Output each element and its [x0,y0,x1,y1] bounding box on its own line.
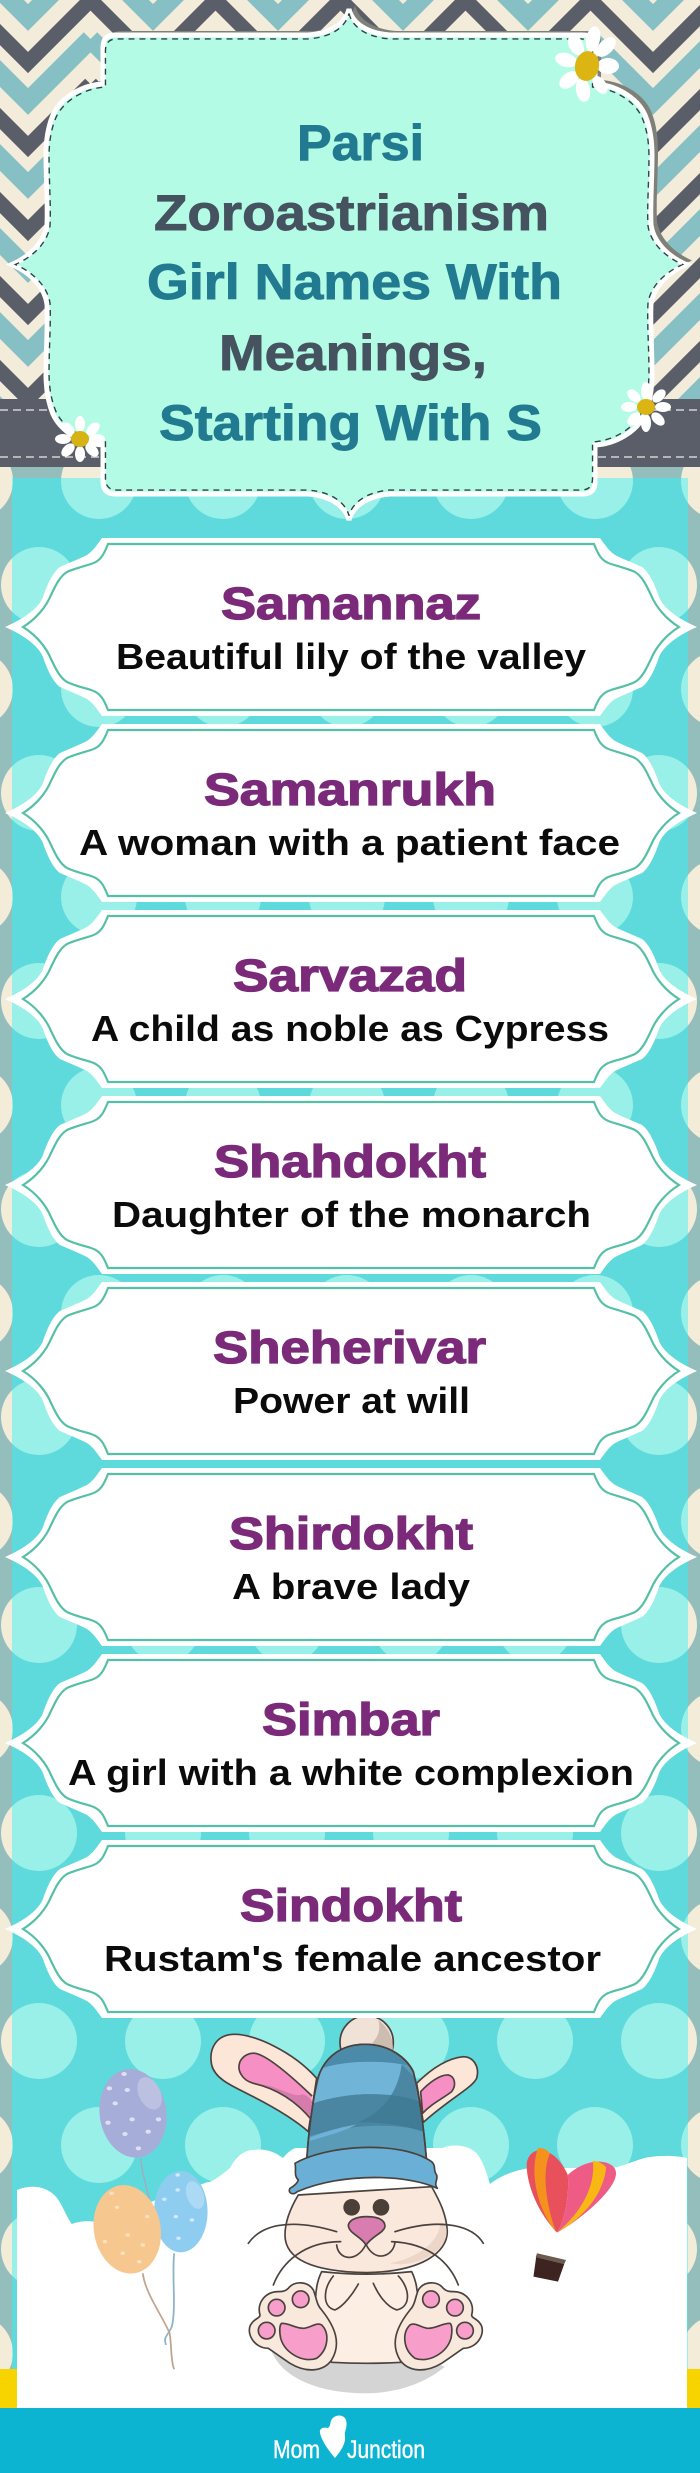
ground shadow [467,2352,560,2393]
icon: daisy top right [553,25,619,103]
meaning: A brave lady [232,1566,470,1607]
meaning: A girl with a white complexion [68,1752,634,1793]
hat [307,2044,427,2162]
card: Shirdokht [5,1468,697,1646]
yellow corner blocks [0,2369,700,2409]
background: polka dot frame strips [0,465,700,2375]
meaning: A child as noble as Cypress [91,1008,609,1049]
name: Samannaz [221,578,481,629]
dark stitched band [0,399,700,467]
title: Meanings, [219,325,487,381]
nose [348,2217,385,2245]
card shape [5,1654,697,1832]
title: Parsi [297,115,424,171]
card: Sindokht [5,1840,697,2018]
pompom [340,2016,393,2069]
meaning: Power at will [233,1380,470,1421]
background: teal polka dot panel [12,478,688,2409]
footer bar [0,2408,700,2473]
title [147,115,562,451]
card shape [5,910,697,1088]
card: Samanrukh [5,724,697,902]
card shape [5,724,697,902]
name: Sarvazad [233,950,467,1001]
hat brim [289,2147,437,2194]
icon: daisy bottom right [621,382,671,432]
name: Sheherivar [213,1322,486,1373]
illustration: balloons [89,2067,208,2369]
panel: title card [12,5,692,520]
name: Sindokht [240,1880,462,1931]
title: Zoroastrianism [154,185,549,241]
eyes [343,2199,360,2216]
card: Samannaz [5,538,697,716]
left foot [249,2283,336,2370]
illustration: heart hot-air balloon [527,2148,616,2282]
card: Sarvazad [5,910,697,1088]
card: Shahdokht [5,1096,697,1274]
whiskers [248,2224,483,2285]
meaning: A woman with a patient face [79,822,620,863]
arms [325,2276,358,2310]
card: Sheherivar [5,1282,697,1460]
title: Girl Names With [147,254,562,310]
card shape [5,538,697,716]
logo: MomJunction [273,2416,425,2464]
title card shadow [96,6,692,262]
logo wordmark: Junction: Junction [347,2436,425,2464]
title card body [12,9,686,520]
logo icon [320,2416,347,2458]
name: Shirdokht [229,1508,473,1559]
name: Samanrukh [204,764,496,815]
right foot [395,2283,482,2370]
meaning: Beautiful lily of the valley [116,636,586,677]
left ear [211,2034,317,2132]
background: chevron header [0,0,700,402]
card: Simbar [5,1654,697,1832]
white clouds [17,2146,687,2410]
mouth [337,2242,395,2257]
card shape [5,1840,697,2018]
name: Simbar [262,1694,440,1745]
title: Starting With S [159,395,542,451]
logo wordmark: Mom: Mom [273,2436,320,2464]
head [285,2187,447,2273]
card shape [5,1096,697,1274]
card shape [5,1468,697,1646]
card shape [5,1282,697,1460]
right ear [417,2057,478,2122]
name: Shahdokht [214,1136,486,1187]
body [316,2272,418,2363]
meaning: Rustam's female ancestor [104,1938,601,1979]
title card stitched edge [15,13,683,516]
icon: daisy bottom left [55,416,105,462]
illustration: bunny wearing a striped hat [211,2016,560,2393]
meaning: Daughter of the monarch [112,1194,591,1235]
